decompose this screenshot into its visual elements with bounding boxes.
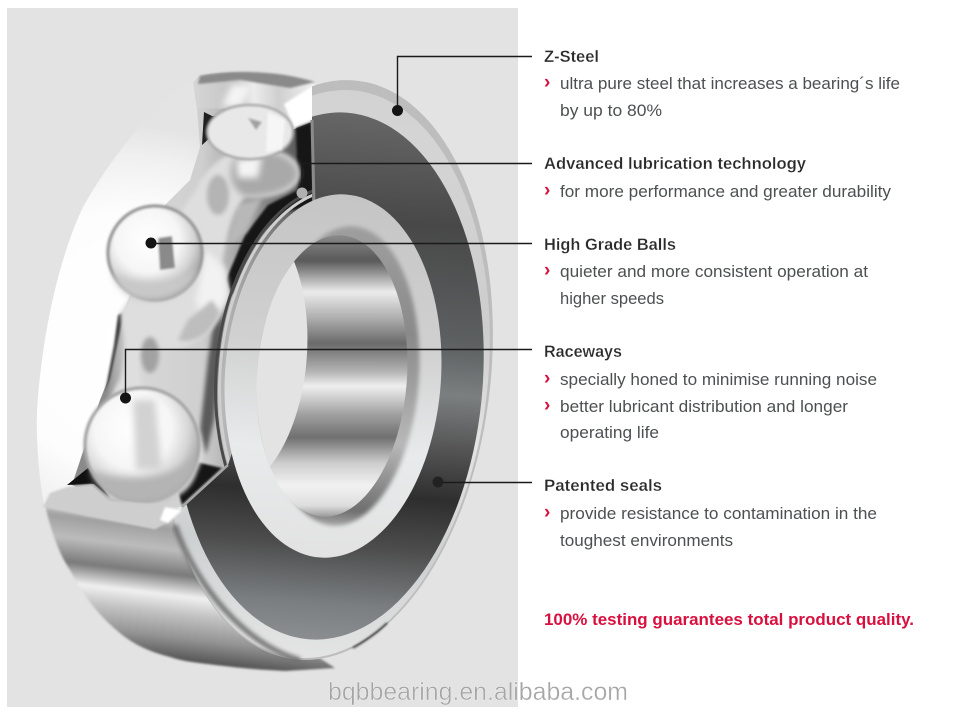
- text: Patented seals: provide resistance to contamination in the: [560, 504, 877, 523]
- text: High Grade Balls: quieter and more consistent operation at: [560, 262, 868, 281]
- marker: lubrication: [296, 188, 308, 198]
- bore through-hole and steel: [256, 235, 408, 517]
- text: Raceways: Raceways: [544, 342, 622, 361]
- outer ring front face: [172, 80, 493, 660]
- text: Advanced lubrication technology: for more performance and greater durability: [560, 182, 891, 201]
- marker: balls: [146, 238, 156, 248]
- line: z-steel: [398, 56, 532, 110]
- text: Patented seals: Patented seals: [544, 476, 662, 495]
- line: seals: [438, 482, 532, 484]
- seal cut edge: [182, 465, 228, 507]
- text: Raceways: better lubricant distribution and longer: [560, 397, 848, 416]
- text: Raceways: ›: [544, 395, 550, 416]
- line: lubrication: [302, 164, 532, 190]
- text: High Grade Balls: High Grade Balls: [544, 235, 676, 254]
- dark raceway details: [67, 112, 313, 505]
- cage: [101, 149, 300, 500]
- text: High Grade Balls: [544, 235, 868, 308]
- seal: [186, 112, 484, 640]
- inner ring step: [257, 221, 429, 531]
- text: Patented seals: ›: [544, 502, 550, 523]
- raceway band behind balls: [72, 108, 312, 510]
- rim black edge: [353, 623, 387, 648]
- text: Raceways: [544, 342, 877, 442]
- line: raceways: [126, 350, 532, 397]
- text: High Grade Balls: ›: [544, 260, 550, 281]
- text: Advanced lubrication technology: Advanced lubrication technology: [544, 154, 807, 173]
- lower ball: [85, 388, 199, 503]
- markers: [120, 105, 444, 488]
- top cut steel face: [193, 72, 315, 130]
- text: High Grade Balls: higher speeds: [560, 289, 664, 308]
- bearing illustration: [37, 63, 521, 677]
- middle ball: [108, 206, 202, 300]
- outer ring steel side: [45, 505, 335, 671]
- text: Z-Steel: Z-Steel: [544, 47, 599, 66]
- callout lines: [126, 56, 532, 482]
- watermark: bqbbearing.en.alibaba.com: [328, 678, 628, 706]
- text: Z-Steel: ›: [544, 72, 550, 93]
- inner ring groove: [214, 190, 312, 467]
- text: Raceways: operating life: [560, 423, 659, 442]
- text: Z-Steel: ultra pure steel that increases a bearing´s life: [560, 74, 900, 93]
- marker: seals: [432, 476, 444, 488]
- text: Patented seals: toughest environments: [560, 531, 733, 550]
- text: Patented seals: [544, 476, 877, 550]
- inner ring front face: [213, 187, 453, 565]
- text: Raceways: specially honed to minimise running noise: [560, 370, 877, 389]
- text: Z-Steel: by up to 80%: [560, 101, 662, 120]
- text: Advanced lubrication technology: ›: [544, 180, 550, 201]
- quality statement: 100% testing guarantees total product quality.: [544, 610, 914, 629]
- background panel: [7, 8, 518, 707]
- line: balls: [151, 242, 532, 244]
- cut floor: [43, 484, 180, 529]
- seal left edge: [312, 120, 314, 205]
- marker: z-steel: [392, 105, 403, 116]
- text: Advanced lubrication technology: [544, 154, 891, 201]
- top ball: [207, 105, 293, 159]
- text: Z-Steel: [544, 47, 900, 120]
- marker: raceways: [120, 392, 131, 404]
- outer ring translucent cutaway: [37, 72, 312, 510]
- bright chip at cut: [160, 507, 182, 523]
- text: Raceways: ›: [544, 368, 550, 389]
